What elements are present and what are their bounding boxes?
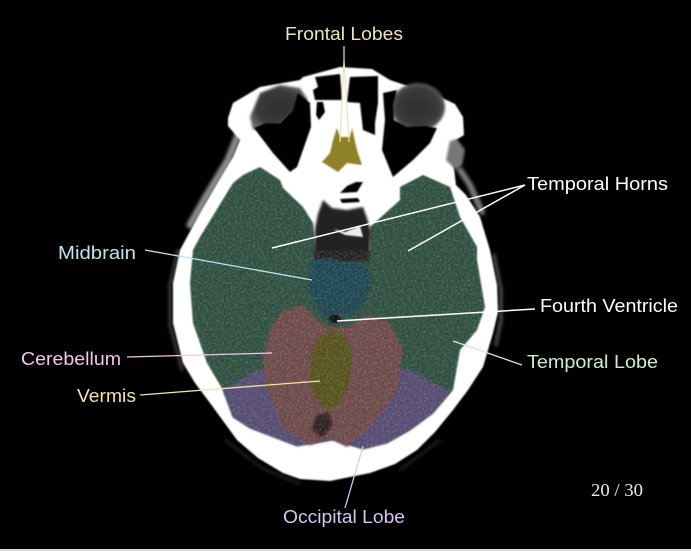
orbit: left black bbox=[254, 93, 311, 172]
label: Fourth Ventricle bbox=[337, 296, 678, 321]
sinus: left frontal bbox=[313, 74, 342, 100]
orbit: right black bbox=[382, 90, 437, 177]
label: Cerebellum bbox=[21, 349, 272, 369]
CT scan bbox=[170, 67, 501, 484]
orbit: left globe bbox=[250, 85, 308, 130]
central cistern bbox=[314, 200, 371, 262]
label: Frontal Lobes bbox=[285, 24, 403, 142]
label: Cerebellum: Cerebellum bbox=[21, 349, 121, 369]
cerebellum bbox=[263, 305, 403, 447]
sinus: right frontal bbox=[347, 76, 378, 135]
label: Temporal Horns: Temporal Horns bbox=[527, 174, 668, 194]
vermis bbox=[310, 330, 352, 410]
midbrain bbox=[307, 258, 372, 318]
label: Temporal Horns bbox=[272, 174, 668, 251]
label: Frontal Lobes: Frontal Lobes bbox=[285, 24, 403, 44]
scalp soft tissue bbox=[170, 135, 501, 484]
sinus: small left bbox=[316, 102, 325, 120]
orbit: right globe bbox=[391, 83, 445, 131]
label: Temporal Lobe: Temporal Lobe bbox=[527, 352, 658, 372]
fourth ventricle bbox=[329, 315, 341, 323]
label: Midbrain: Midbrain bbox=[58, 243, 136, 263]
label: Fourth Ventricle: Fourth Ventricle bbox=[540, 296, 678, 316]
occipital lobe bbox=[223, 370, 450, 449]
label: Vermis bbox=[77, 381, 320, 406]
temporalis right bbox=[446, 139, 465, 170]
frontal lobes region bbox=[322, 128, 362, 172]
brain texture noise bbox=[185, 165, 490, 455]
falx notch bbox=[312, 412, 333, 438]
label: Temporal Lobe bbox=[453, 341, 658, 372]
label: Vermis: Vermis bbox=[77, 386, 136, 406]
skull bbox=[173, 67, 498, 481]
label: Midbrain bbox=[58, 243, 312, 280]
dorsum sellae bbox=[333, 226, 363, 237]
sphenoid sinus bbox=[340, 182, 363, 203]
label: Occipital Lobe: Occipital Lobe bbox=[283, 507, 405, 527]
label: Occipital Lobe bbox=[283, 446, 405, 527]
slice counter: 20 / 30 bbox=[591, 480, 643, 500]
brain base bbox=[190, 167, 485, 449]
